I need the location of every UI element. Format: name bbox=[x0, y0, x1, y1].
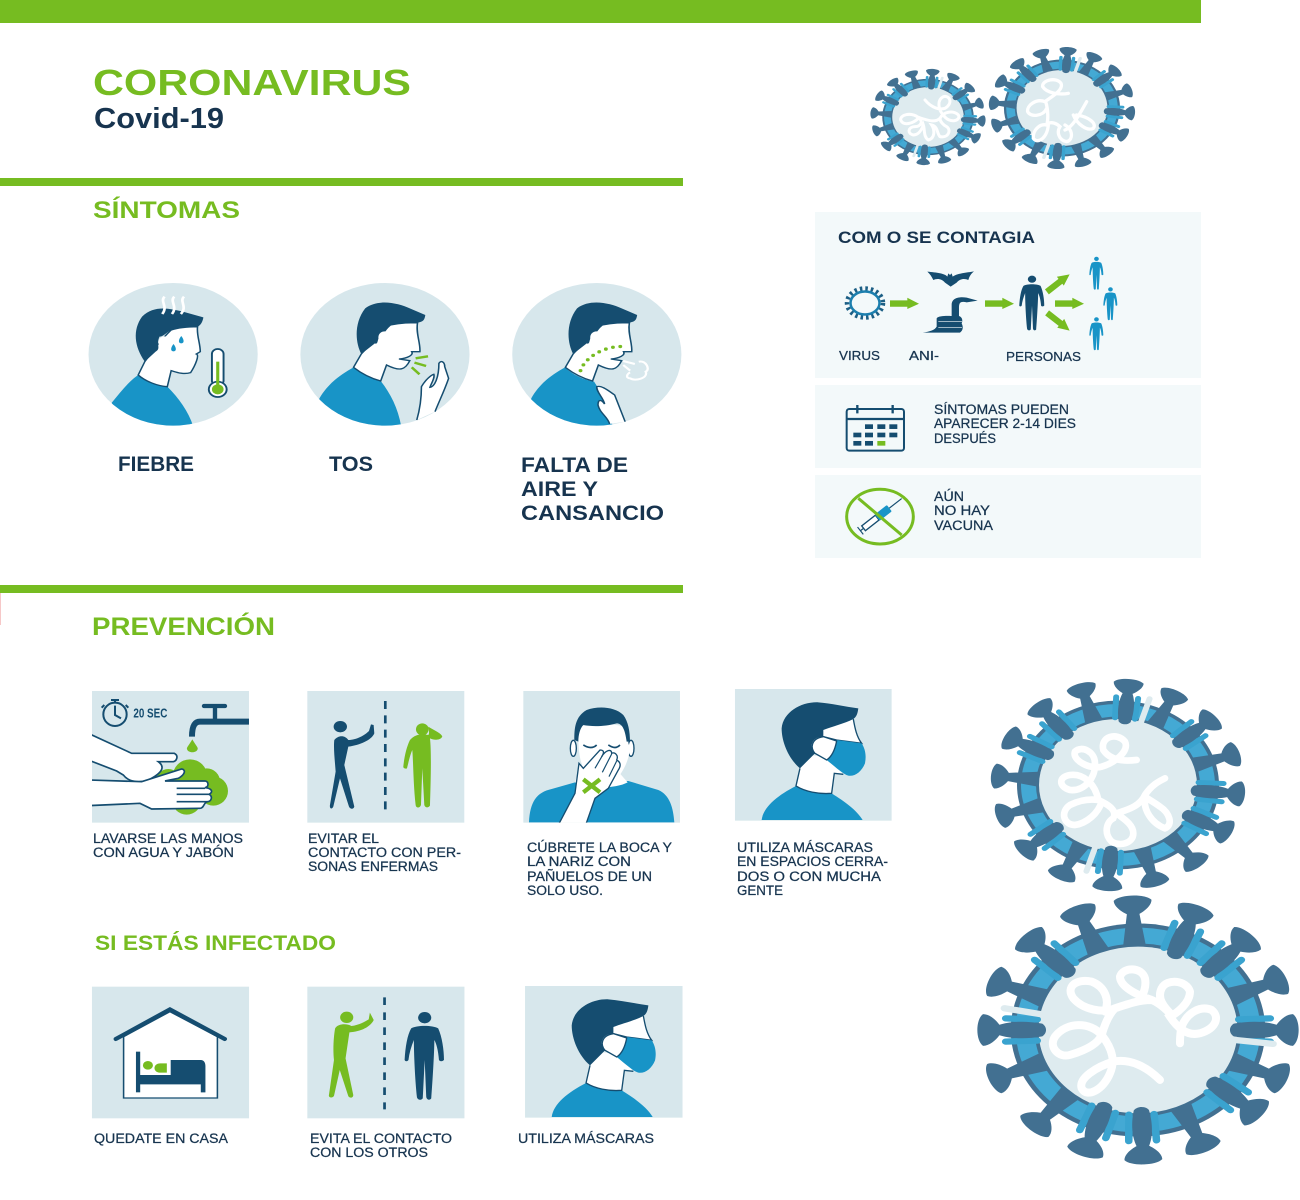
top green bar bbox=[0, 0, 1201, 23]
arrow: animal to person bbox=[985, 298, 1014, 309]
arrow: person down bbox=[1044, 308, 1073, 335]
subtitle: Covid-19: Covid-19 bbox=[94, 103, 224, 135]
label: tos: TOS bbox=[329, 453, 373, 476]
virus small left bbox=[870, 68, 986, 166]
caption: use masks: UTILIZA MÁSCARAS bbox=[518, 1131, 654, 1146]
incubation text bbox=[934, 402, 1076, 446]
caption: stay home: QUEDATE EN CASA bbox=[94, 1131, 228, 1146]
heading: si estás infectado: SI ESTÁS INFECTADO bbox=[95, 932, 336, 955]
prevention captions bbox=[93, 831, 888, 898]
icon: person bottom bbox=[1089, 317, 1103, 350]
vaccine text: AÚN bbox=[934, 489, 964, 504]
caption: cover mouth: CÚBRETE LA BOCA Y bbox=[527, 840, 672, 855]
incubation text: DESPUÉS bbox=[934, 431, 996, 446]
symptom: shortness of breath bbox=[512, 283, 681, 427]
icon: person bbox=[1019, 276, 1044, 330]
panel: cómo se contagia bbox=[815, 212, 1201, 378]
label: falta de aire: CANSANCIO bbox=[521, 502, 664, 525]
caption: masks: GENTE bbox=[737, 883, 783, 898]
label: personas: PERSONAS bbox=[1006, 349, 1081, 364]
label: virus: VIRUS bbox=[839, 348, 880, 363]
arrow: virus to animal bbox=[890, 298, 919, 309]
incubation text: APARECER 2-14 DIES bbox=[934, 416, 1076, 431]
prevention: cover mouth bbox=[523, 691, 680, 825]
top virus illustrations bbox=[870, 46, 1136, 170]
caption: masks bbox=[737, 840, 888, 898]
symptom: fever bbox=[89, 283, 258, 427]
caption: avoid contact: EVITAR EL bbox=[308, 831, 380, 846]
prevention: avoid contact bbox=[307, 691, 464, 823]
caption: wash hands: LAVARSE LAS MANOS bbox=[93, 831, 243, 846]
caption: wash hands bbox=[93, 831, 243, 860]
icon: snake bbox=[923, 297, 978, 333]
vaccine text: VACUNA bbox=[934, 518, 993, 533]
prevention: masks bbox=[735, 689, 892, 821]
icon: calendar bbox=[847, 405, 904, 451]
symptom: cough bbox=[300, 283, 470, 427]
green divider above prevention bbox=[0, 585, 683, 593]
panel: no vaccine bbox=[815, 475, 1201, 558]
caption: avoid contact: CONTACTO CON PER- bbox=[308, 845, 461, 860]
arrow: person up bbox=[1043, 270, 1073, 296]
infected: avoid others bbox=[307, 987, 464, 1118]
vaccine text bbox=[934, 489, 993, 533]
caption: cover mouth: SOLO USO. bbox=[527, 883, 603, 898]
heading: prevención: PREVENCIÓN bbox=[92, 611, 275, 641]
label: fiebre: FIEBRE bbox=[118, 453, 194, 476]
icon: bat bbox=[927, 271, 974, 287]
caption: avoid others: CON LOS OTROS bbox=[310, 1145, 428, 1160]
caption: masks: EN ESPACIOS CERRA- bbox=[737, 854, 888, 869]
arrow: person right bbox=[1055, 298, 1084, 309]
incubation text: SÍNTOMAS PUEDEN bbox=[934, 402, 1069, 417]
caption: cover mouth bbox=[527, 840, 672, 898]
prevention: hand washing bbox=[88, 691, 249, 823]
icon: person middle bbox=[1103, 287, 1117, 320]
infected: stay home bbox=[92, 987, 249, 1118]
green divider under title bbox=[0, 178, 683, 186]
icon: person top bbox=[1089, 257, 1103, 290]
icon: crossed syringe bbox=[847, 489, 913, 544]
caption: cover mouth: LA NARIZ CON bbox=[527, 854, 631, 869]
caption: cover mouth: PAÑUELOS DE UN bbox=[527, 869, 652, 884]
caption: avoid others: EVITA EL CONTACTO bbox=[310, 1131, 452, 1146]
prevention: hand washing: 20 SEC bbox=[133, 706, 168, 721]
large virus bottom bbox=[977, 895, 1299, 1165]
label: falta de aire: FALTA DE bbox=[521, 454, 628, 477]
caption: avoid contact: SONAS ENFERMAS bbox=[308, 859, 438, 874]
caption: masks: UTILIZA MÁSCARAS bbox=[737, 840, 873, 855]
panel: incubation bbox=[815, 385, 1201, 468]
title: CORONAVIRUS: CORONAVIRUS bbox=[93, 62, 411, 103]
heading: síntomas: SÍNTOMAS bbox=[93, 196, 240, 224]
caption: avoid others bbox=[310, 1131, 452, 1160]
label: falta de aire: AIRE Y bbox=[521, 478, 598, 501]
caption: avoid contact bbox=[308, 831, 461, 874]
icon: small virus bbox=[847, 288, 883, 318]
large virus top bbox=[990, 678, 1246, 892]
contagion heading: COM O SE CONTAGIA bbox=[838, 228, 1035, 247]
caption: wash hands: CON AGUA Y JABÓN bbox=[93, 845, 234, 860]
virus small right bbox=[988, 46, 1136, 170]
label: falta de aire bbox=[521, 454, 664, 525]
caption: masks: DOS O CON MUCHA bbox=[737, 869, 881, 884]
label: animales: ANI- bbox=[909, 348, 939, 363]
vaccine text: NO HAY bbox=[934, 503, 990, 518]
infected: mask bbox=[525, 986, 683, 1118]
infected captions bbox=[94, 1131, 654, 1160]
